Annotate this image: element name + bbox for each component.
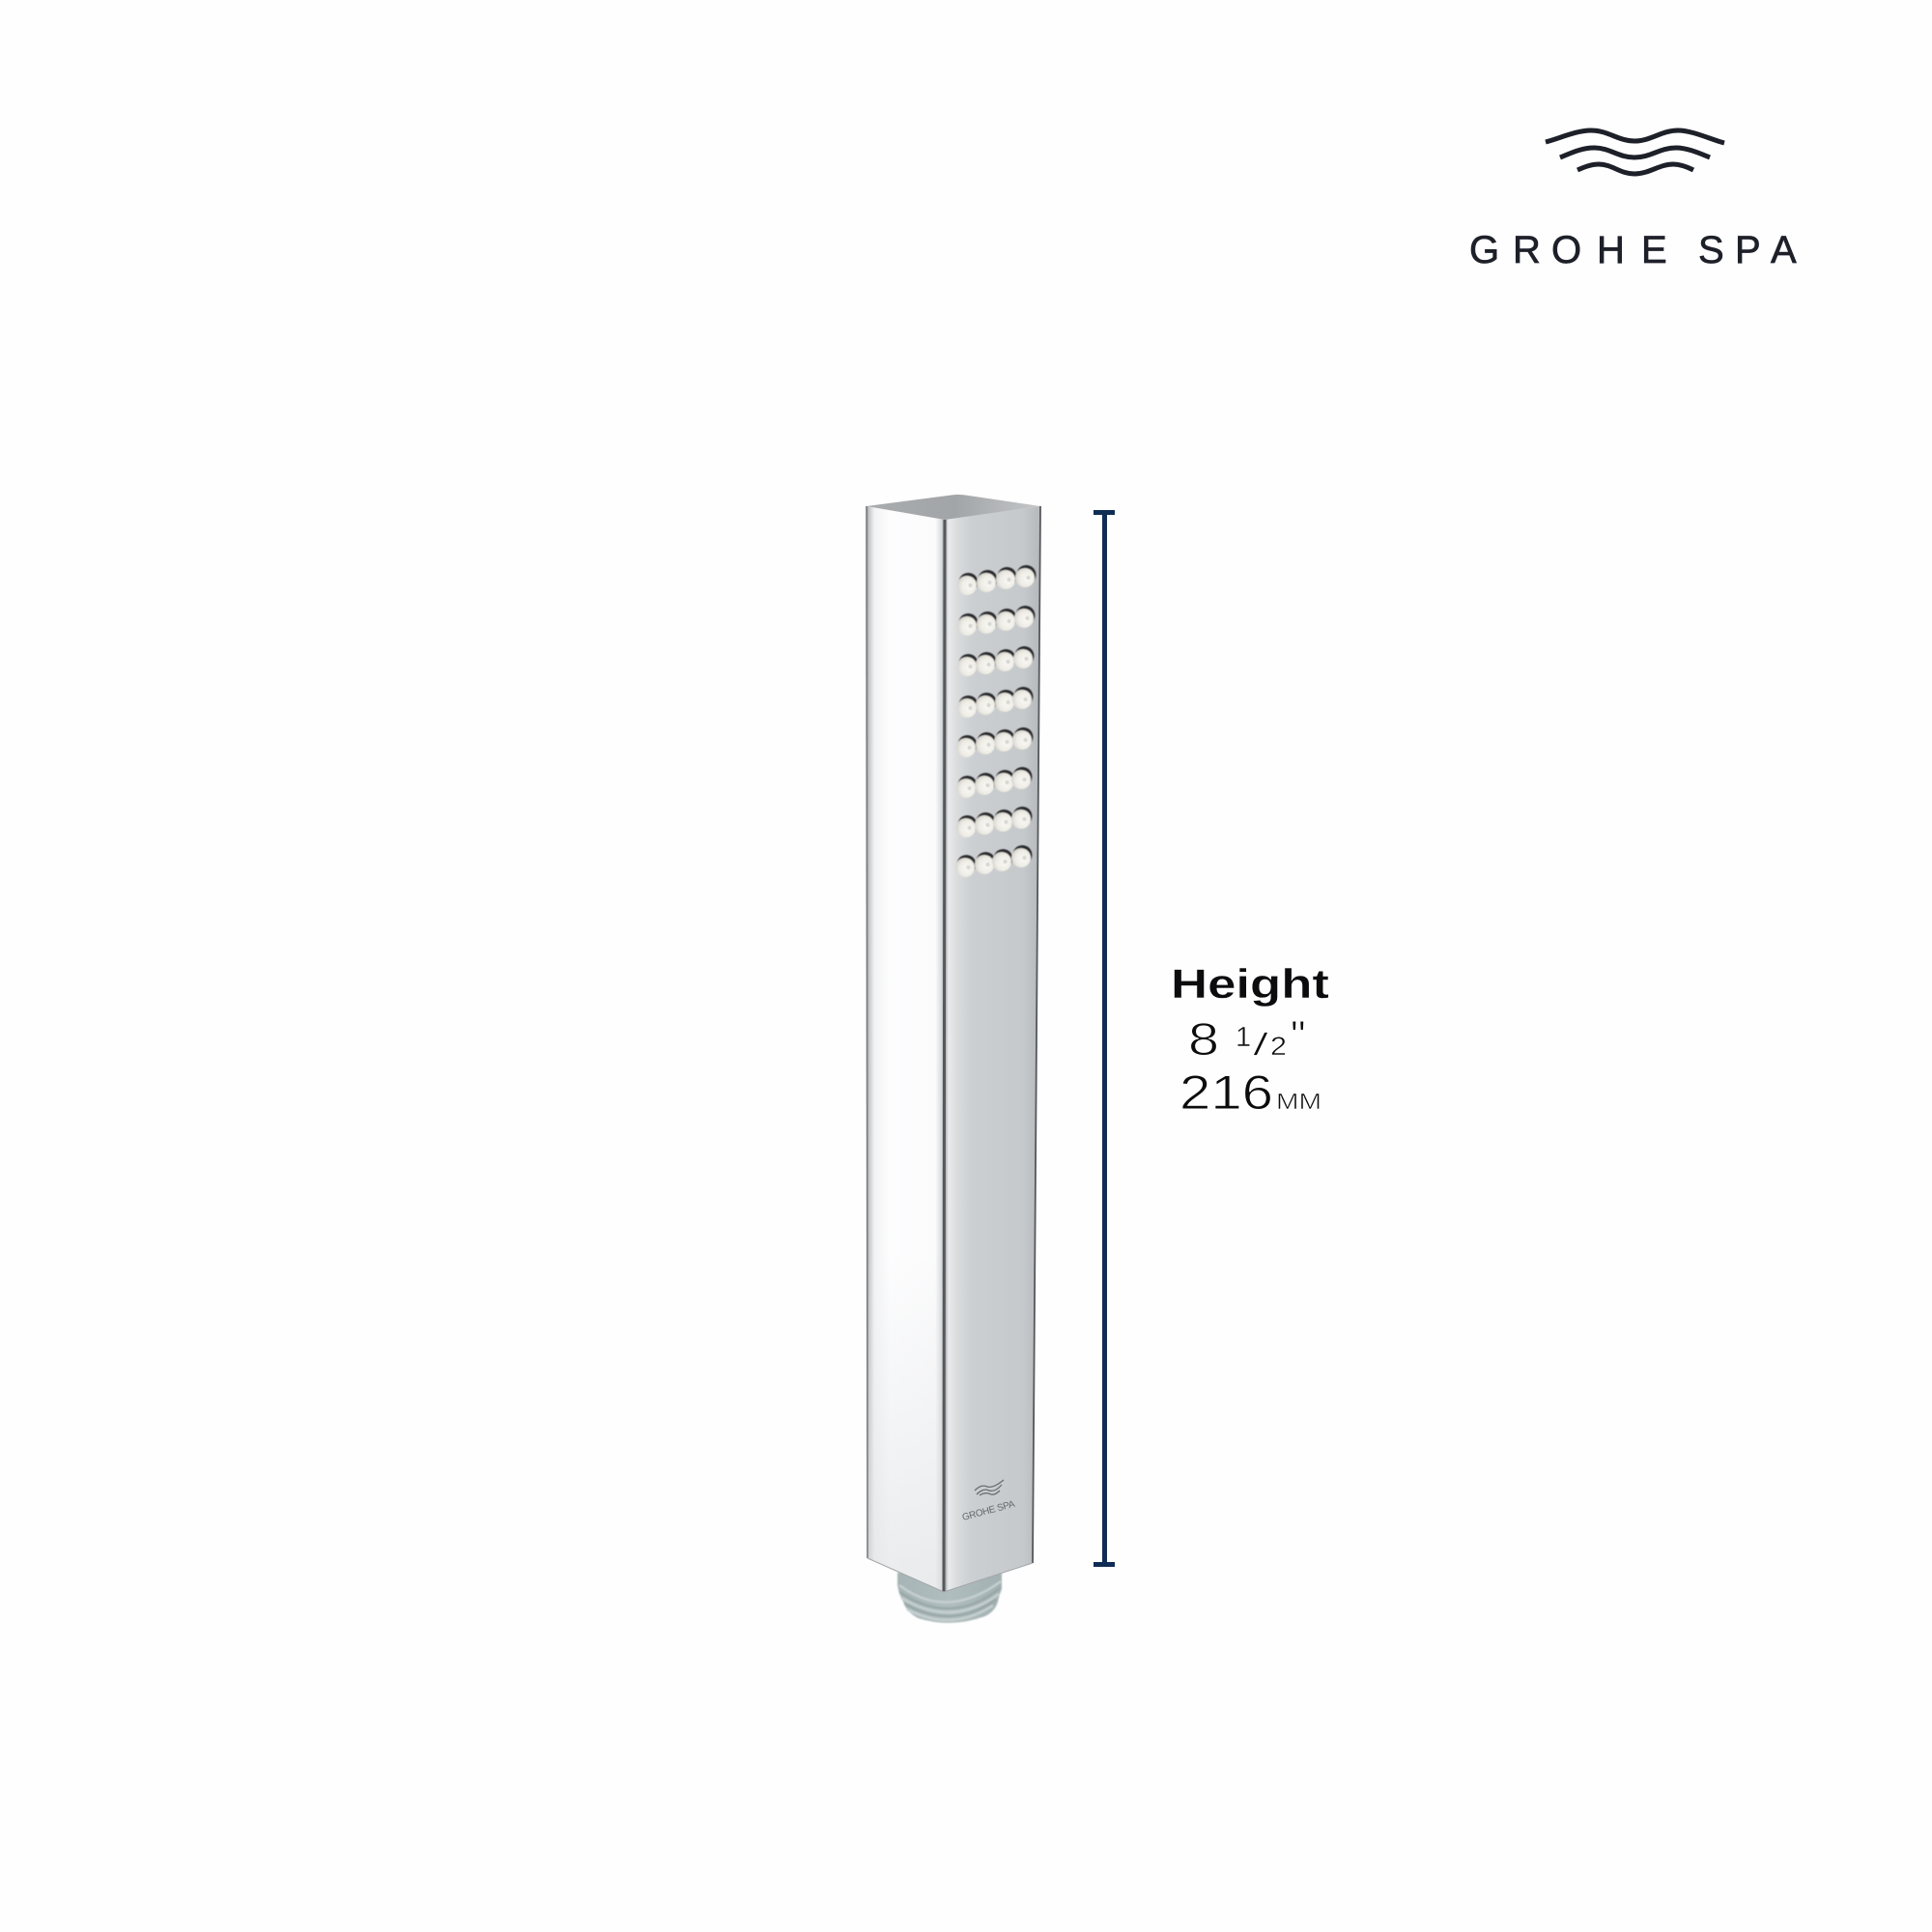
- spray nozzles: [955, 565, 1036, 877]
- imperial value: 8 1/2 inches: 8: [1188, 1013, 1219, 1065]
- top face: [867, 495, 1040, 520]
- imperial value: 8 1/2 inches: ": [1291, 1012, 1306, 1060]
- icon: three waves: [1546, 130, 1724, 174]
- left face: [867, 506, 945, 1592]
- height label: [1171, 961, 1329, 1120]
- imperial value: 8 1/2 inches: /: [1253, 1027, 1268, 1062]
- metric value: 216 mm: 216: [1179, 1065, 1273, 1120]
- imperial value: 8 1/2 inches: 2: [1270, 1032, 1287, 1061]
- engraved wordmark: GROHE SPA: [961, 1499, 1016, 1523]
- right face: [944, 506, 1040, 1592]
- icon: engraved waves: [975, 1480, 1004, 1495]
- heading: Height: Height: [1171, 961, 1329, 1008]
- engraved logo on body: [961, 1480, 1016, 1523]
- metric value: 216 mm: [1179, 1065, 1321, 1120]
- dimension line: height: [1094, 510, 1115, 1567]
- metric value: 216 mm: MM: [1276, 1089, 1321, 1114]
- logo: GROHE SPA: [1469, 130, 1797, 271]
- imperial value: 8 1/2 inches: 1: [1236, 1022, 1251, 1053]
- face edges: [867, 506, 1040, 1592]
- logo wordmark: GROHE SPA: [1469, 229, 1797, 271]
- threaded connector: [897, 1573, 1002, 1623]
- imperial value: 8 1/2 inches: [1188, 1012, 1306, 1065]
- product: square hand shower: [867, 495, 1040, 1623]
